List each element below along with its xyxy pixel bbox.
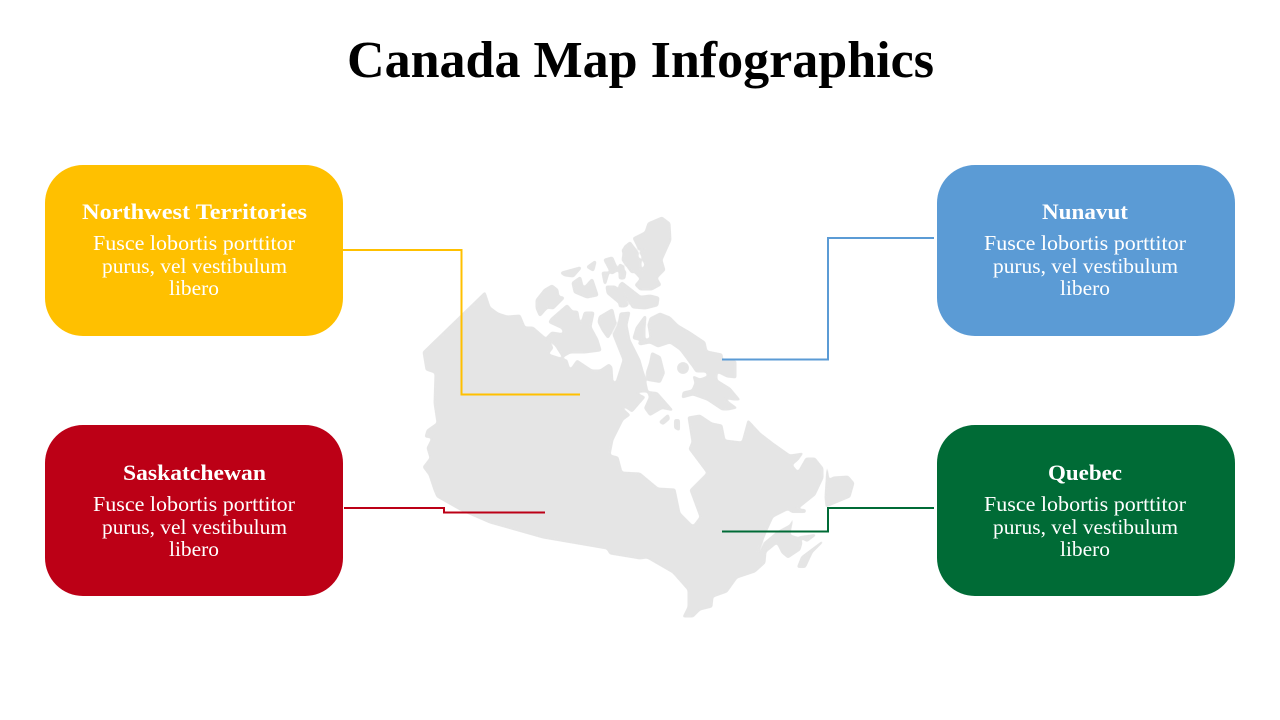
panel: Nunavut: libero	[1060, 276, 1110, 300]
connector: Northwest Territories	[343, 250, 580, 394]
panel: Nunavut	[937, 165, 1235, 336]
panel: Quebec: Quebec	[1048, 460, 1122, 485]
map: Ellesmere Island	[633, 217, 671, 290]
map: mainland	[423, 292, 823, 617]
map: Atlantic islands	[788, 509, 822, 567]
panel: Northwest Territories: Fusce lobortis porttitor	[93, 231, 295, 255]
connector: Saskatchewan	[344, 508, 545, 512]
connector: Nunavut	[722, 238, 934, 360]
panel: Quebec: libero	[1060, 537, 1110, 561]
panel: Northwest Territories	[45, 165, 343, 336]
map: Arctic islands	[537, 243, 658, 356]
panel: Saskatchewan: purus, vel vestibulum	[102, 515, 287, 539]
panel: Quebec: Fusce lobortis porttitor	[984, 492, 1186, 516]
panel: Northwest Territories: libero	[169, 276, 219, 300]
panel: Nunavut: Nunavut	[1042, 199, 1129, 224]
title: Canada Map Infographics	[347, 32, 934, 89]
panel: Quebec	[937, 425, 1235, 596]
map: Baffin Island	[638, 313, 740, 410]
panel: Nunavut: purus, vel vestibulum	[993, 254, 1178, 278]
panel: Saskatchewan: Saskatchewan	[123, 460, 266, 485]
connector: Quebec	[722, 508, 934, 532]
map: Hudson Bay islands	[645, 353, 688, 430]
panel: Saskatchewan	[45, 425, 343, 596]
panel: Northwest Territories: Northwest Territories	[82, 199, 307, 224]
panel: Northwest Territories: purus, vel vestibulum	[102, 254, 287, 278]
panel: Quebec: purus, vel vestibulum	[993, 515, 1178, 539]
map: Newfoundland	[825, 467, 854, 507]
panel: Nunavut: Fusce lobortis porttitor	[984, 231, 1186, 255]
panel: Saskatchewan: Fusce lobortis porttitor	[93, 492, 295, 516]
panel: Saskatchewan: libero	[169, 537, 219, 561]
map of Canada	[423, 217, 854, 617]
